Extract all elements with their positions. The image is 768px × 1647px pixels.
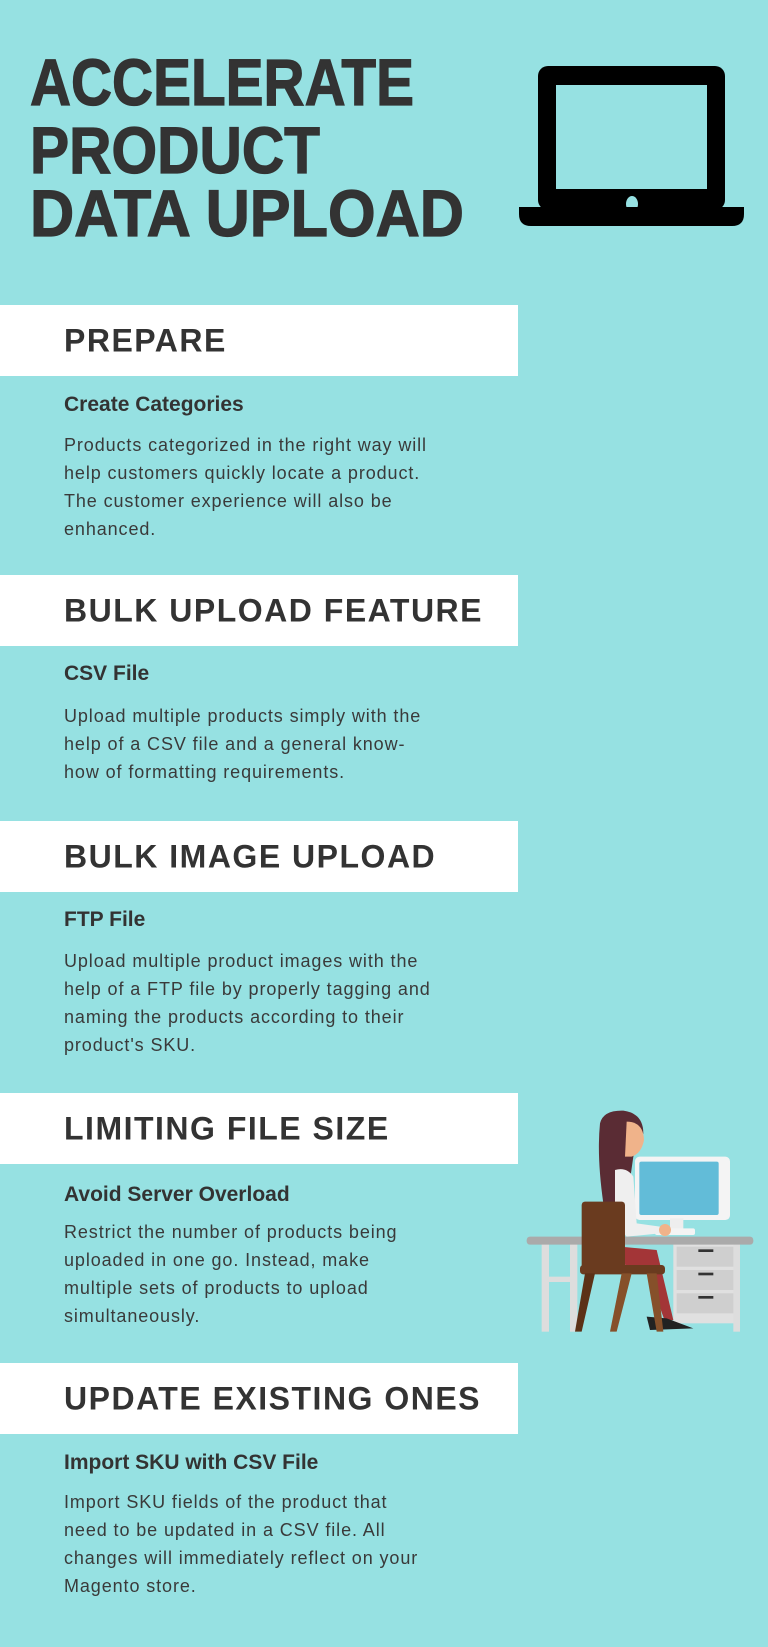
text: limiting: simultaneously. [64, 1306, 200, 1326]
panel: prepare heading: PREPARE [64, 322, 227, 358]
panel: limiting file size heading: LIMITING FILE SIZE [64, 1110, 390, 1146]
panel: bulk upload heading: BULK UPLOAD FEATURE [64, 592, 483, 628]
text: prepare: enhanced. [64, 519, 156, 539]
panel: bulk image heading: BULK IMAGE UPLOAD [64, 838, 436, 874]
panel: bulk upload heading [0, 575, 518, 646]
text: limiting [64, 1222, 397, 1326]
text: bulk upload [64, 706, 421, 782]
panel: bulk image heading [0, 821, 518, 892]
text: limiting: Restrict the number of products being [64, 1222, 397, 1242]
text: bulk image: help of a FTP file by properly tagging and [64, 979, 431, 999]
icon: laptop [519, 66, 744, 226]
text: prepare: help customers quickly locate a product. [64, 463, 420, 483]
text: limiting: multiple sets of products to upload [64, 1278, 369, 1298]
subheading: csv file: CSV File [64, 662, 149, 685]
subheading: create categories: Create Categories [64, 393, 244, 416]
text: update [64, 1492, 418, 1596]
text: update: need to be updated in a CSV file. All [64, 1520, 386, 1540]
text: update: Magento store. [64, 1576, 197, 1596]
title: PRODUCT [30, 113, 320, 187]
text: bulk upload: help of a CSV file and a general know- [64, 734, 405, 754]
text: prepare: Products categorized in the right way will [64, 435, 427, 455]
text: bulk image: Upload multiple product images with the [64, 951, 418, 971]
panel: prepare heading [0, 305, 518, 376]
title: DATA UPLOAD [30, 176, 464, 250]
illustration: woman at desk [526, 1110, 754, 1332]
text: bulk upload: how of formatting requirements. [64, 762, 345, 782]
text: bulk image: naming the products according to their [64, 1007, 404, 1027]
text: bulk image: product's SKU. [64, 1035, 196, 1055]
subheading: import sku: Import SKU with CSV File [64, 1451, 318, 1474]
subheading: avoid server overload: Avoid Server Overload [64, 1183, 290, 1206]
text: bulk image [64, 951, 431, 1055]
title: ACCELERATE [30, 45, 414, 119]
subheading: ftp file: FTP File [64, 908, 145, 931]
panel: limiting file size heading [0, 1093, 518, 1164]
panel: update heading [0, 1363, 518, 1434]
text: update: Import SKU fields of the product that [64, 1492, 387, 1512]
text: update: changes will immediately reflect on your [64, 1548, 418, 1568]
text: bulk upload: Upload multiple products simply with the [64, 706, 421, 726]
text: prepare: The customer experience will also be [64, 491, 393, 511]
text: prepare [64, 435, 427, 539]
text: limiting: uploaded in one go. Instead, make [64, 1250, 370, 1270]
title [30, 45, 464, 250]
panel: update heading: UPDATE EXISTING ONES [64, 1380, 481, 1416]
